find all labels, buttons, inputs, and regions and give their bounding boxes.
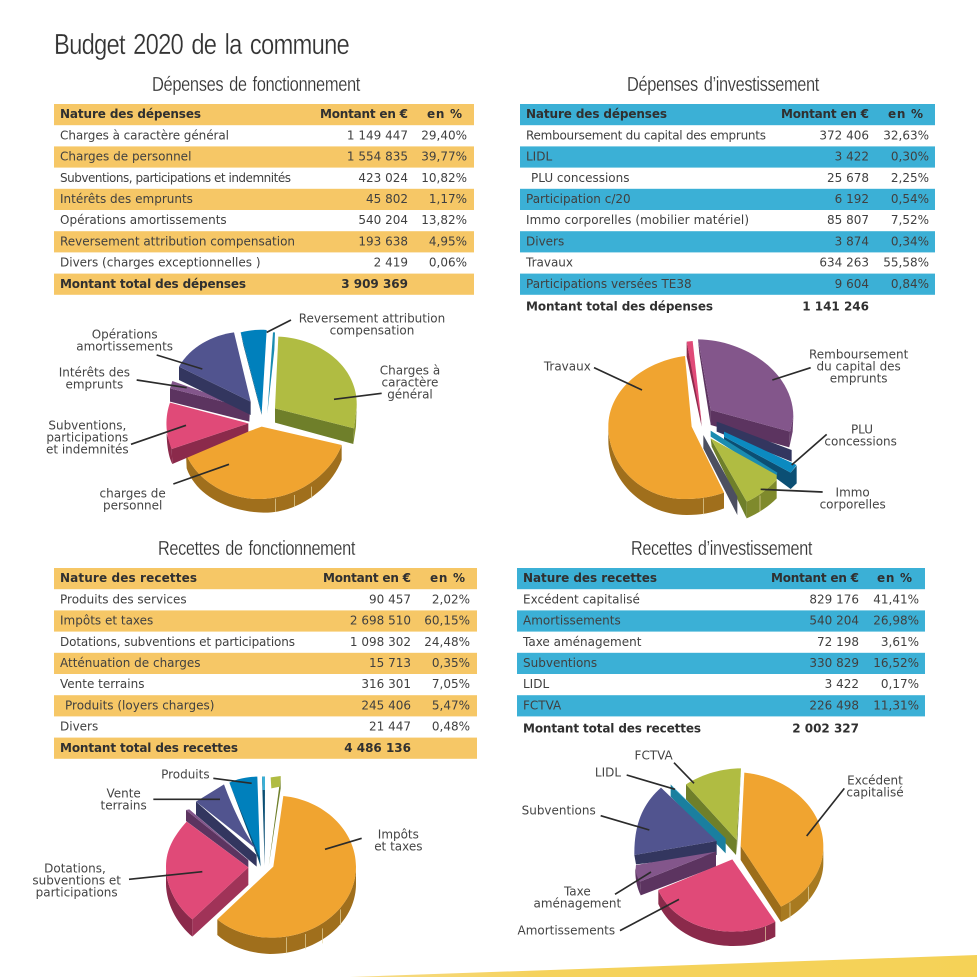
pie labels: Intérêts des [59, 366, 130, 380]
table: recettes d'investissement: 3 422 [825, 677, 859, 691]
table: dépenses de fonctionnement: 423 024 [358, 171, 408, 185]
table: dépenses de fonctionnement: 39,77% [421, 150, 467, 164]
table: dépenses de fonctionnement: 3 909 369 [341, 277, 408, 291]
table: dépenses de fonctionnement [54, 104, 474, 295]
table: dépenses d'investissement: 25 678 [827, 171, 869, 185]
table: dépenses d'investissement: 0,54% [891, 192, 929, 206]
table: dépenses de fonctionnement: Reversement attribution compensation [60, 234, 295, 248]
table: dépenses de fonctionnement: 10,82% [421, 171, 467, 185]
table: recettes d'investissement: FCTVA [523, 698, 562, 712]
table: dépenses d'investissement: LIDL [526, 150, 552, 164]
table: recettes d'investissement: 829 176 [809, 592, 859, 606]
table: dépenses d'investissement: Remboursement du capital des emprunts [526, 128, 766, 142]
table: recettes d'investissement: 540 204 [809, 614, 859, 628]
pie labels: Subventions [522, 803, 596, 817]
table: dépenses d'investissement: 3 422 [835, 150, 869, 164]
table: recettes d'investissement: 16,52% [873, 656, 919, 670]
table: dépenses de fonctionnement: Montant total des dépenses [60, 277, 246, 291]
pie labels: participations [36, 886, 118, 900]
table: dépenses d'investissement: Travaux [525, 256, 573, 270]
table: dépenses d'investissement: Divers [526, 234, 564, 248]
table: dépenses d'investissement: 0,30% [891, 150, 929, 164]
table: dépenses de fonctionnement: Subventions, participations et indemnités [60, 171, 291, 185]
table: recettes de fonctionnement [54, 568, 477, 759]
pie labels: Travaux [543, 360, 591, 374]
pie chart: dépenses d'investissement [543, 339, 909, 518]
pie labels: Impôts [378, 827, 419, 841]
pie labels: général [387, 388, 433, 402]
pie labels: LIDL [595, 766, 621, 780]
table: recettes de fonctionnement: 90 457 [369, 592, 411, 606]
table: dépenses de fonctionnement: 45 802 [366, 192, 408, 206]
pie chart: dépenses de fonctionnement [46, 312, 445, 513]
heading: dépenses d'investissement: Dépenses d’investissement [627, 74, 820, 96]
heading: recettes de fonctionnement: Recettes de fonctionnement [158, 538, 356, 560]
table: recettes d'investissement: 0,17% [881, 677, 919, 691]
pie labels: emprunts [830, 372, 888, 386]
table: recettes de fonctionnement: 60,15% [424, 614, 470, 628]
table: recettes d'investissement: Nature des recettes [523, 571, 657, 585]
table: dépenses de fonctionnement: 540 204 [358, 213, 408, 227]
pie labels: charges de [100, 486, 166, 500]
table: dépenses d'investissement: 1 141 246 [802, 299, 869, 313]
table: recettes d'investissement: Montant en € [771, 571, 859, 585]
pie labels: aménagement [534, 896, 621, 910]
table: recettes de fonctionnement: 24,48% [424, 635, 470, 649]
table: dépenses d'investissement [520, 104, 935, 313]
pie labels: Opérations [92, 328, 158, 342]
pie labels: FCTVA [635, 748, 674, 762]
table: dépenses de fonctionnement: 1 554 835 [347, 150, 408, 164]
pie labels: Immo [836, 486, 870, 500]
table: dépenses de fonctionnement: 29,40% [421, 128, 467, 142]
pie labels: amortissements [76, 340, 173, 354]
table: dépenses d'investissement: 85 807 [827, 213, 869, 227]
pie labels: Remboursement [809, 347, 909, 361]
table: recettes de fonctionnement: Montant total des recettes [60, 741, 238, 755]
pie chart: recettes de fonctionnement [32, 767, 422, 954]
table: recettes de fonctionnement: 21 447 [369, 720, 411, 734]
table: dépenses d'investissement: Participation c/20 [526, 192, 631, 206]
table: dépenses de fonctionnement: Charges à caractère général [60, 128, 229, 142]
table: dépenses de fonctionnement: Opérations amortissements [60, 213, 227, 227]
table: recettes de fonctionnement: 15 713 [369, 656, 411, 670]
table: dépenses de fonctionnement: 2 419 [374, 256, 408, 270]
heading: dépenses de fonctionnement: Dépenses de fonctionnement [152, 74, 361, 96]
table: recettes d'investissement: Excédent capitalisé [523, 592, 640, 606]
table: dépenses d'investissement: 32,63% [883, 128, 929, 142]
table: recettes de fonctionnement: 2,02% [432, 592, 470, 606]
table: recettes d'investissement: 2 002 327 [792, 721, 859, 735]
pie chart: recettes d'investissement [518, 748, 904, 946]
heading: recettes d'investissement: Recettes d’investissement [631, 538, 813, 560]
table: recettes de fonctionnement: Dotations, subventions et participations [60, 635, 295, 649]
pie labels: concessions [824, 435, 897, 449]
table: recettes d'investissement: 226 498 [809, 698, 859, 712]
table: recettes d'investissement: Subventions [523, 656, 597, 670]
table: dépenses de fonctionnement: Montant en € [320, 107, 408, 121]
pie labels: caractère [382, 376, 438, 390]
table: dépenses d'investissement: Participations versées TE38 [526, 277, 692, 291]
table: dépenses de fonctionnement: 1,17% [429, 192, 467, 206]
table: recettes de fonctionnement: 1 098 302 [350, 635, 411, 649]
pie labels: Dotations, [44, 862, 106, 876]
pie labels: subventions et [32, 874, 121, 888]
pie labels: emprunts [65, 378, 123, 392]
table: recettes de fonctionnement: en % [430, 571, 465, 585]
table: recettes de fonctionnement: 0,48% [432, 720, 470, 734]
pie labels: Amortissements [518, 923, 615, 937]
pie labels [518, 748, 904, 937]
pie labels: capitalisé [846, 785, 904, 799]
table: recettes de fonctionnement: 0,35% [432, 656, 470, 670]
pie labels [543, 347, 909, 512]
table: dépenses de fonctionnement: Nature des dépenses [60, 107, 201, 121]
table: dépenses d'investissement: 7,52% [891, 213, 929, 227]
table: recettes de fonctionnement: Divers [60, 720, 98, 734]
table: recettes de fonctionnement: Atténuation de charges [60, 656, 201, 670]
pie labels: Reversement attribution [299, 312, 445, 326]
table: recettes d'investissement: 72 198 [817, 635, 859, 649]
title: Budget 2020 de la commune [54, 29, 349, 61]
table: dépenses d'investissement: Nature des dépenses [526, 107, 667, 121]
table: recettes d'investissement: en % [877, 571, 912, 585]
table: dépenses de fonctionnement: 4,95% [429, 234, 467, 248]
table: recettes d'investissement: 330 829 [809, 656, 859, 670]
table: dépenses d'investissement: 6 192 [835, 192, 869, 206]
table: dépenses de fonctionnement: 193 638 [358, 234, 408, 248]
pie labels: terrains [101, 799, 147, 813]
table: dépenses d'investissement: PLU concessions [531, 171, 629, 185]
pie labels [32, 767, 422, 900]
table: recettes de fonctionnement: Nature des recettes [60, 571, 197, 585]
pie labels: et taxes [374, 839, 422, 853]
pie labels: Excédent [847, 773, 903, 787]
table: recettes d'investissement: Amortissements [523, 614, 621, 628]
pie labels [46, 312, 445, 512]
table: recettes de fonctionnement: Impôts et taxes [60, 614, 153, 628]
pie labels: Vente [107, 787, 141, 801]
pie labels: compensation [330, 324, 414, 338]
table: dépenses d'investissement: 55,58% [883, 256, 929, 270]
table: recettes d'investissement: 3,61% [881, 635, 919, 649]
pie labels: Taxe [563, 884, 591, 898]
table: dépenses d'investissement: 0,84% [891, 277, 929, 291]
table: dépenses d'investissement: 2,25% [891, 171, 929, 185]
table: dépenses de fonctionnement: 1 149 447 [347, 128, 408, 142]
table: recettes de fonctionnement: Vente terrains [60, 677, 144, 691]
table: dépenses de fonctionnement: Intérêts des emprunts [60, 192, 193, 206]
table: recettes d'investissement: LIDL [523, 677, 549, 691]
pie labels: Charges à [380, 364, 440, 378]
pie labels: Subventions, [48, 418, 126, 432]
table: dépenses d'investissement: 9 604 [835, 277, 869, 291]
table: recettes d'investissement [517, 568, 925, 735]
table: recettes d'investissement: Taxe aménagement [522, 635, 642, 649]
bottom yellow band [350, 955, 977, 977]
pie labels: PLU [851, 422, 873, 436]
table: recettes de fonctionnement: 7,05% [432, 677, 470, 691]
table: recettes de fonctionnement: Produits des services [60, 592, 187, 606]
table: dépenses d'investissement: 3 874 [835, 234, 869, 248]
table: recettes de fonctionnement: Montant en € [323, 571, 411, 585]
table: recettes d'investissement: 41,41% [873, 592, 919, 606]
table: dépenses d'investissement: Montant total des dépenses [526, 299, 713, 313]
table: recettes d'investissement: Montant total des recettes [523, 721, 701, 735]
table: dépenses d'investissement: 372 406 [819, 128, 869, 142]
pie labels: du capital des [817, 360, 901, 374]
table: dépenses d'investissement: 0,34% [891, 234, 929, 248]
table: dépenses de fonctionnement: Charges de personnel [60, 150, 191, 164]
pie labels: participations [46, 430, 128, 444]
table: recettes de fonctionnement: 316 301 [361, 677, 411, 691]
table: dépenses d'investissement: en % [888, 107, 923, 121]
pie labels: personnel [103, 498, 162, 512]
table: recettes de fonctionnement: 5,47% [432, 698, 470, 712]
table: recettes d'investissement: 26,98% [873, 614, 919, 628]
table: dépenses de fonctionnement: 0,06% [429, 256, 467, 270]
table: recettes de fonctionnement: Produits (loyers charges) [65, 698, 214, 712]
table: recettes d'investissement: 11,31% [873, 698, 919, 712]
pie labels: et indemnités [46, 442, 129, 456]
table: dépenses de fonctionnement: 13,82% [421, 213, 467, 227]
pie labels: Produits [161, 767, 210, 781]
table: recettes de fonctionnement: 4 486 136 [344, 741, 411, 755]
table: dépenses de fonctionnement: Divers (charges exceptionnelles ) [60, 256, 261, 270]
table: dépenses d'investissement: 634 263 [819, 256, 869, 270]
table: recettes de fonctionnement: 245 406 [361, 698, 411, 712]
pie labels: corporelles [820, 498, 886, 512]
table: dépenses d'investissement: Immo corporelles (mobilier matériel) [526, 213, 749, 227]
table: recettes de fonctionnement: 2 698 510 [350, 614, 411, 628]
table: dépenses de fonctionnement: en % [427, 107, 462, 121]
table: dépenses d'investissement: Montant en € [781, 107, 869, 121]
